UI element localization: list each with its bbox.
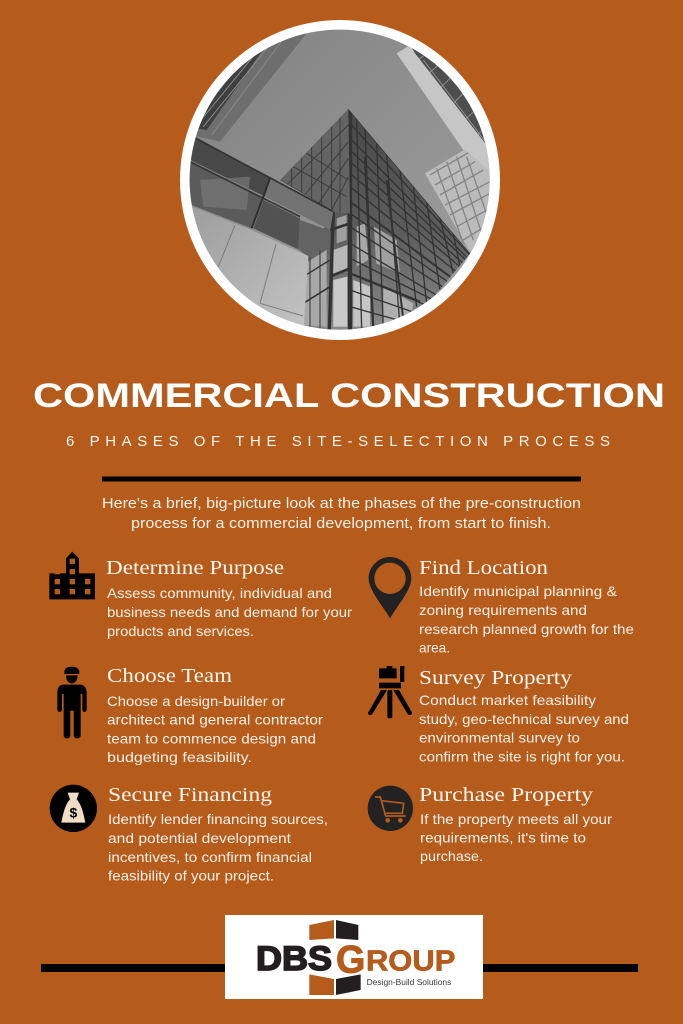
intro text: Here's a brief, big-picture look at the phases of the pre-construction: [102, 496, 581, 512]
panel: determine purpose: [49, 552, 353, 639]
description: Identify municipal planning &: [419, 584, 617, 599]
icon: shopping cart: [368, 786, 413, 831]
description: Choose a design-builder or: [107, 694, 286, 709]
description: [420, 812, 613, 864]
heading: Determine Purpose: [106, 557, 284, 579]
hero photo: building in white circular frame: [180, 20, 500, 340]
heading: Secure Financing: [108, 784, 272, 806]
description: zoning requirements and: [419, 603, 587, 618]
description: architect and general contractor: [107, 712, 324, 728]
description: area.: [419, 640, 450, 656]
panel: choose team: [57, 665, 324, 765]
icon: surveyor tripod: [368, 666, 412, 718]
description: budgeting feasibility.: [107, 750, 252, 765]
description: team to commence design and: [107, 732, 316, 746]
intro text: [102, 496, 581, 532]
heading: Survey Property: [419, 667, 573, 689]
icon: map pin: [369, 557, 411, 618]
logo: DBS Group: ROUP: [366, 946, 455, 978]
footer rule right: [482, 964, 638, 972]
subtitle: 6 PHASES OF THE SITE-SELECTION PROCESS: [66, 433, 610, 450]
description: Conduct market feasibility: [419, 693, 596, 708]
description: feasibility of your project.: [108, 868, 274, 884]
icon: money bag: $: [69, 804, 77, 820]
panel: survey property: [368, 666, 629, 764]
icon: construction worker: [57, 667, 87, 738]
description: requirements, it's time to: [420, 830, 586, 846]
description: [419, 584, 634, 656]
description: [107, 586, 353, 639]
heading: Choose Team: [107, 665, 232, 687]
description: [107, 694, 324, 765]
description: research planned growth for the: [419, 622, 634, 637]
heading: Purchase Property: [419, 784, 594, 806]
logo: DBS Group: DBS: [256, 940, 332, 978]
logo: DBS Group: G: [336, 938, 365, 981]
logo: DBS Group: Design-Build Solutions: [367, 978, 451, 987]
heading rule: [102, 476, 581, 482]
description: Assess community, individual and: [107, 586, 332, 601]
description: If the property meets all your: [420, 812, 613, 827]
panel: find location: [369, 557, 634, 656]
description: products and services.: [107, 624, 254, 639]
description: incentives, to confirm financial: [108, 850, 312, 865]
description: and potential development: [108, 831, 291, 846]
description: environmental survey to: [419, 730, 580, 746]
icon: money bag: [50, 785, 97, 832]
description: business needs and demand for your: [107, 605, 353, 620]
description: study, geo-technical survey and: [419, 712, 629, 727]
heading: Find Location: [419, 557, 548, 579]
panel: purchase property: [368, 784, 613, 864]
intro text: process for a commercial development, from start to finish.: [131, 516, 551, 532]
title: COMMERCIAL CONSTRUCTION: [33, 377, 665, 415]
description: [108, 812, 328, 884]
icon: office building: [49, 552, 95, 599]
description: confirm the site is right for you.: [419, 750, 625, 764]
description: purchase.: [420, 849, 483, 864]
panel: secure financing: [50, 784, 328, 884]
description: Identify lender financing sources,: [108, 812, 328, 827]
logo: DBS Group: [225, 915, 483, 999]
description: [419, 693, 629, 764]
footer rule left: [41, 964, 226, 972]
